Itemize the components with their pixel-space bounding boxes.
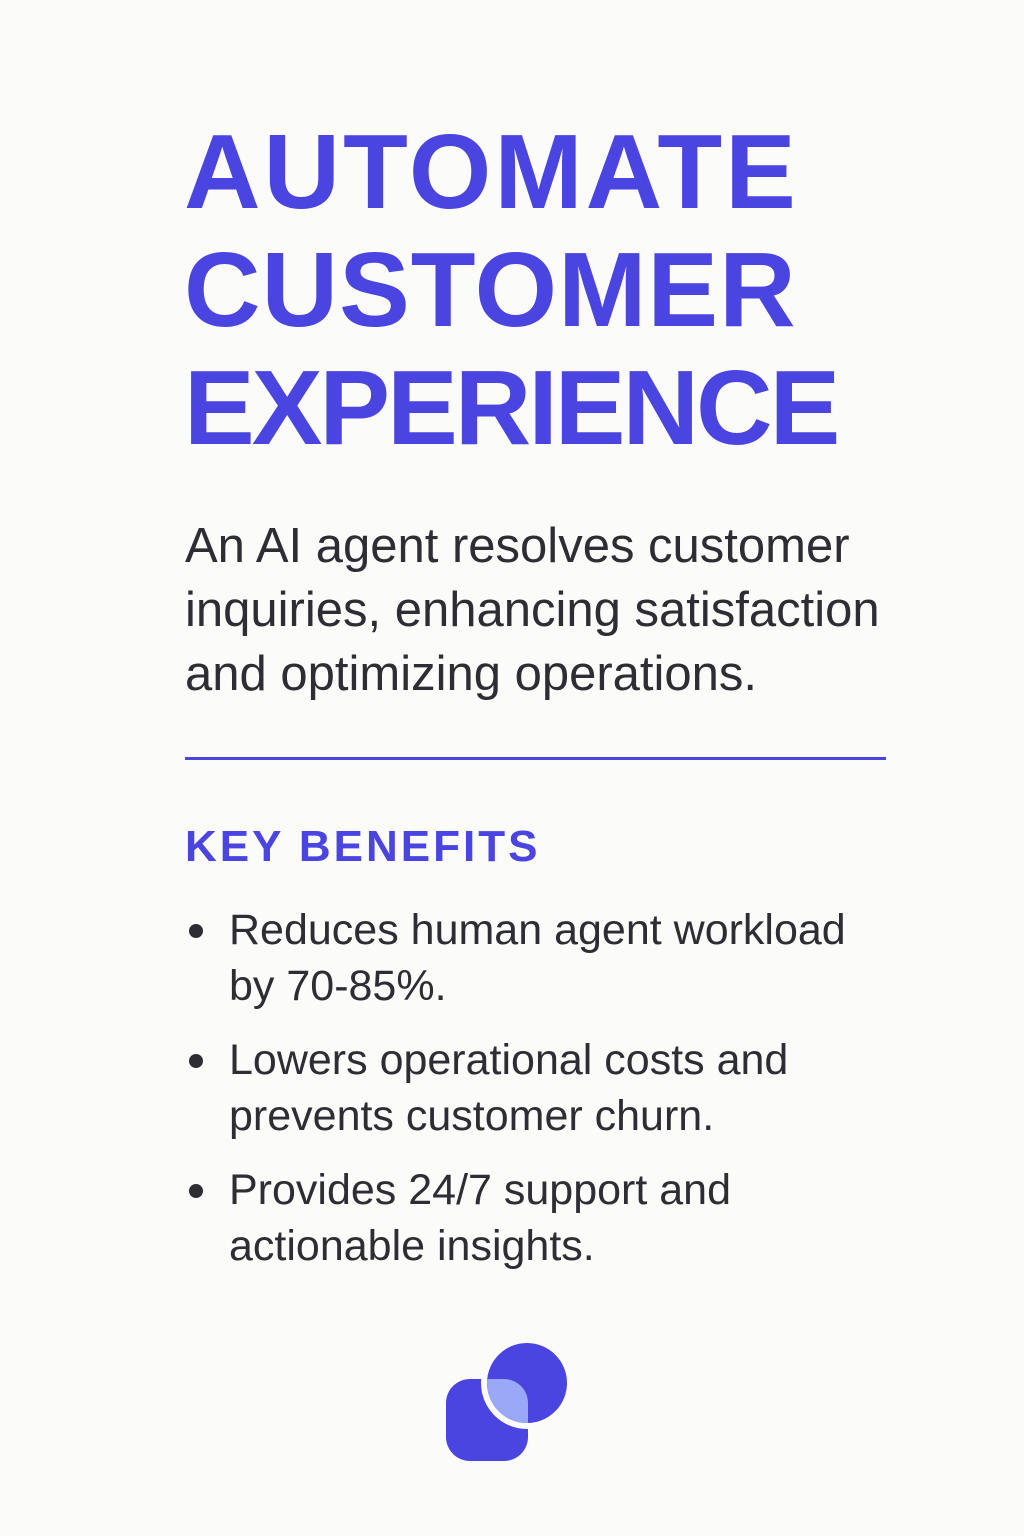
benefit 2: [189, 1036, 788, 1140]
subtitle paragraph: and optimizing operations.: [185, 647, 757, 701]
benefit 3: actionable insights.: [229, 1222, 595, 1270]
subtitle paragraph: [185, 519, 880, 701]
benefit 3: [189, 1166, 731, 1270]
benefit 2: Lowers operational costs and: [229, 1036, 788, 1084]
benefit 1: Reduces human agent workload: [229, 906, 846, 954]
benefit 3: Provides 24/7 support and: [229, 1166, 731, 1214]
benefit 1: [189, 906, 846, 1010]
heading: key benefits: KEY BENEFITS: [185, 822, 540, 871]
subtitle paragraph: inquiries, enhancing satisfaction: [185, 583, 880, 637]
title: AUTOMATE: [184, 113, 799, 231]
benefit 2: prevents customer churn.: [229, 1092, 714, 1140]
title: [184, 113, 837, 467]
benefit 1: by 70-85%.: [229, 962, 447, 1010]
subtitle paragraph: An AI agent resolves customer: [185, 519, 850, 573]
title: EXPERIENCE: [184, 349, 837, 467]
title: CUSTOMER: [184, 231, 797, 349]
icon: logo: [446, 1343, 567, 1461]
